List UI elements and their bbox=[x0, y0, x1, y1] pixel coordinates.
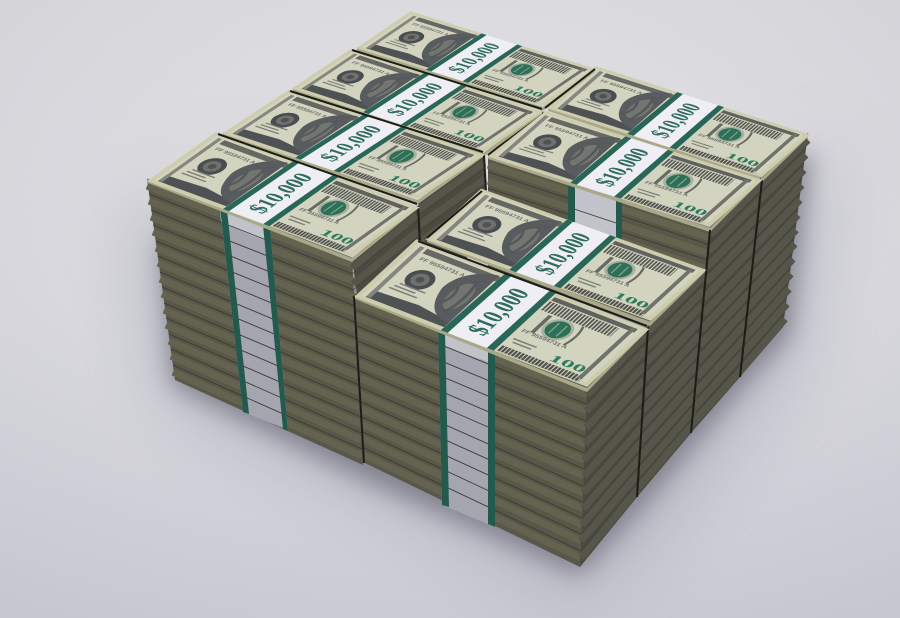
top bill and $10,000 strap: $10,000 bbox=[646, 101, 707, 141]
seam bbox=[418, 206, 420, 242]
top bundle thickness bbox=[147, 179, 417, 262]
top bundle thickness bbox=[357, 47, 595, 111]
top bill and $10,000 strap bbox=[292, 49, 543, 152]
seam bbox=[290, 91, 483, 152]
stack: back left row, rear bbox=[357, 11, 597, 111]
all stacks bbox=[147, 11, 810, 567]
right side of stack bbox=[352, 205, 425, 330]
seam bbox=[352, 50, 542, 109]
top bundle thickness bbox=[355, 295, 647, 392]
seam between right stacks bbox=[740, 180, 762, 377]
left side of stack bbox=[147, 179, 363, 465]
seams bbox=[354, 296, 648, 497]
top bill and $10,000 strap: $10,000 bbox=[462, 285, 537, 339]
top bill and $10,000 strap bbox=[488, 110, 763, 227]
stack: left row, third bbox=[292, 49, 543, 157]
right side of stack bbox=[637, 268, 705, 497]
top bill and $10,000 strap bbox=[147, 132, 420, 256]
seam bbox=[427, 191, 482, 238]
stack: low rear bbox=[426, 189, 710, 497]
top bundle thickness bbox=[223, 132, 483, 204]
seam bbox=[488, 112, 543, 155]
right side of stack bbox=[740, 133, 808, 377]
top bill and $10,000 strap bbox=[354, 239, 649, 387]
top bundle thickness bbox=[488, 155, 760, 232]
top bill and $10,000 strap bbox=[547, 66, 810, 177]
seam between right stacks bbox=[691, 230, 710, 433]
seam bbox=[218, 134, 417, 204]
top bundle thickness bbox=[548, 107, 808, 182]
stack: left row, second bbox=[222, 90, 490, 290]
top bill and $10,000 strap: $10,000 bbox=[242, 170, 319, 216]
seam bbox=[484, 155, 486, 192]
seam bbox=[418, 241, 647, 326]
right side of stack bbox=[691, 178, 761, 433]
right side of stack bbox=[418, 153, 490, 290]
top bill and $10,000 strap: $10,000 bbox=[315, 123, 388, 164]
seam bbox=[545, 69, 595, 108]
top bill and $10,000 strap bbox=[357, 11, 597, 106]
top bill and $10,000 strap: $10,000 bbox=[443, 41, 505, 75]
ground shadow bbox=[130, 130, 835, 600]
top bill and $10,000 strap: $10,000 bbox=[528, 229, 597, 278]
top bill and $10,000 strap: $10,000 bbox=[382, 81, 450, 118]
stack: low front bbox=[354, 239, 649, 567]
stack: back right bbox=[547, 66, 810, 377]
top bundle thickness bbox=[293, 87, 542, 157]
top bill and $10,000 strap bbox=[222, 90, 485, 199]
left side of stack bbox=[355, 295, 587, 567]
top bill and $10,000 strap bbox=[426, 189, 706, 321]
left side of stack bbox=[488, 155, 710, 340]
right side of stack bbox=[580, 327, 647, 567]
stack: right row, front bbox=[488, 110, 763, 433]
top bundle thickness bbox=[427, 238, 705, 326]
top bill and $10,000 strap: $10,000 bbox=[588, 145, 656, 189]
stack: left row, front tall stack bbox=[147, 132, 425, 465]
